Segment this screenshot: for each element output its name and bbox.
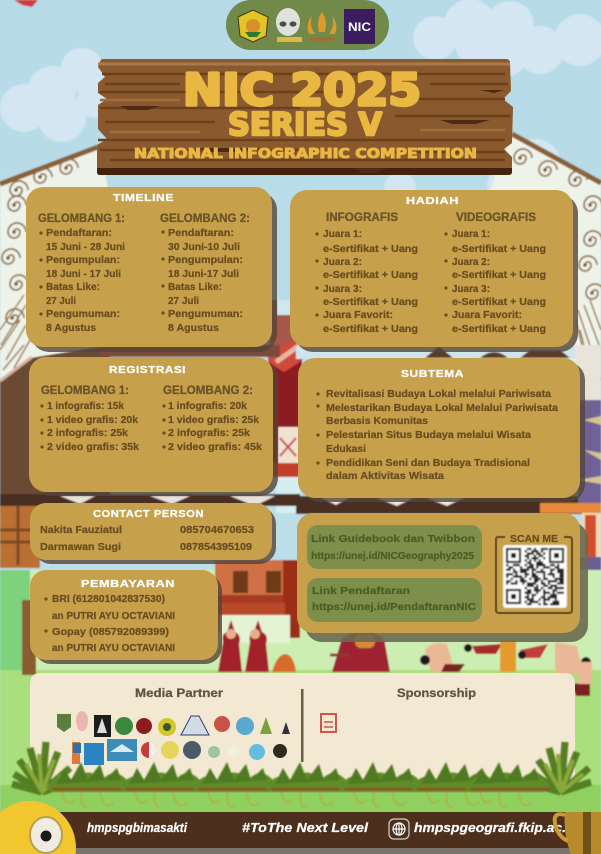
heading: sponsorship: Sponsorship [397,688,476,700]
column: gelombang 2 [160,211,250,334]
column: videografis: e-Sertifikat + Uang [452,296,546,308]
icon: globe [389,819,409,839]
panel: media partner and sponsorship [30,673,575,790]
panel: links and qr [297,513,588,642]
subtema list: Berbasis Komunitas [326,415,428,427]
column: infografis: INFOGRAFIS [326,210,398,224]
footer website: hmpspgeografi.fkip.ac. [414,820,566,835]
logo: alien mascot [276,8,302,42]
wooden title board [97,59,513,175]
contact 1 [40,524,254,536]
title line 3: NATIONAL INFOGRAPHIC COMPETITION [134,146,477,162]
column: gelombang 2: 27 Juli [168,295,199,307]
column: gelombang 1: 18 Juni - 17 Juli [46,268,121,280]
qr code [503,545,567,608]
column: videografis: Juara 1: [452,228,490,240]
scan me label: SCAN ME [510,533,558,545]
dancers [218,620,592,696]
panel: contact person [30,503,276,564]
column: gelombang 1 [38,211,125,334]
icon: trophy [555,812,601,854]
column: gelombang 2: Pendaftaran: [168,227,234,239]
column: infografis: Juara Favorit: [323,309,393,321]
ribbon fragment [14,0,38,7]
link button: pendaftaran: Link Pendaftaran [312,585,410,597]
subtema list [316,388,558,482]
column: videografis: e-Sertifikat + Uang [452,243,546,255]
heading: registrasi: REGISTRASI [109,364,186,376]
column: gelombang 1: 8 Agustus [46,322,96,334]
column: videografis: VIDEOGRAFIS [456,210,536,224]
column: gelombang 1 fees: 1 infografis: 15k [47,400,124,412]
link button: guidebook [307,525,482,569]
logo: NIC: NIC [348,22,371,34]
payment details: Gopay (085792089399) [52,626,169,638]
column: gelombang 1: GELOMBANG 1: [38,211,125,225]
right purple roof [575,345,601,410]
footer bar [0,812,601,854]
column: videografis: Juara Favorit: [452,309,522,321]
column: infografis: e-Sertifikat + Uang [323,269,418,281]
column: infografis: Juara 1: [323,228,362,240]
column: gelombang 2 fees [162,383,262,453]
logo: NIC [344,9,375,44]
logo pill [226,0,389,50]
column: videografis: e-Sertifikat + Uang [452,269,546,281]
icon: emoji [0,801,76,854]
media partner logos row 1 [57,711,290,737]
column: gelombang 2: 30 Juni-10 Juli [168,241,240,253]
column: infografis: Juara 2: [323,256,362,268]
link button: pendaftaran: https://unej.id/PendaftaranNIC [312,601,476,613]
left wooden house [0,503,40,568]
column: videografis: Juara 3: [452,283,490,295]
column: gelombang 2: Batas Like: [168,281,222,293]
heading: pembayaran: PEMBAYARAN [81,578,175,590]
column: videografis [444,210,546,335]
subtema list: Revitalisasi Budaya Lokal melalui Pariwisata [326,388,551,400]
logo: university shield [238,10,268,42]
contact 2 [40,541,252,553]
title line 1: NIC 2025 [183,65,421,116]
column: gelombang 2: Pengumuman: [168,308,243,320]
qr block [496,533,572,613]
column: gelombang 2 fees: 2 video grafis: 45k [168,441,262,453]
column: gelombang 2: Pengumpulan: [168,254,243,266]
column: gelombang 2 fees: GELOMBANG 2: [163,383,253,397]
column: gelombang 1 fees: 1 video grafis: 20k [47,414,138,426]
sponsor logo [321,714,336,732]
column: gelombang 1: Pengumuman: [46,308,120,320]
payment details: BRI (612801042837530) [52,593,165,605]
column: infografis [315,210,418,335]
link button: guidebook: https://unej.id/NICGeography2025 [311,550,474,562]
column: gelombang 2 fees: 2 infografis: 25k [168,427,250,439]
column: gelombang 1: Batas Like: [46,281,100,293]
clouds [0,0,601,204]
panel: pembayaran [30,570,222,664]
panel: timeline [26,187,277,352]
contact 1: 085704670653 [180,524,254,536]
footer hashtag: #ToThe Next Level [242,820,368,835]
subtema list: Pendidikan Seni dan Budaya Tradisional [326,457,530,469]
column: gelombang 1 fees [40,383,139,453]
column: gelombang 1: 15 Juni - 28 Juni [46,241,125,253]
ground [0,570,601,815]
link button: pendaftaran [307,578,482,622]
heading: contact person: CONTACT PERSON [93,508,204,520]
column: gelombang 2: GELOMBANG 2: [160,211,250,225]
heading: timeline: TIMELINE [113,192,174,204]
contact 1: Nakita Fauziatul [40,524,122,536]
logo: lotus flame [308,12,336,40]
media partner logos row 2 [72,739,287,765]
column: gelombang 1 fees: 2 video grafis: 35k [47,441,139,453]
column: infografis: e-Sertifikat + Uang [323,323,418,335]
column: gelombang 1: 27 Juli [46,295,76,307]
left gable ornament [0,145,110,382]
subtema list: Pelestarian Situs Budaya melalui Wisata [326,429,531,441]
subtema list: Melestarikan Budaya Lokal Melalui Pariwisata [326,402,558,414]
column: videografis: Juara 2: [452,256,490,268]
contact 2: Darmawan Sugi [40,541,121,553]
column: gelombang 2 fees: 1 infografis: 20k [168,400,247,412]
panel: hadiah [290,190,578,352]
ferns and vine border [12,742,591,808]
panel: subtema [298,358,585,502]
column: gelombang 1: Pendaftaran: [46,227,112,239]
column: infografis: e-Sertifikat + Uang [323,296,418,308]
payment details: an PUTRI AYU OCTAVIANI [52,610,175,622]
subtema list: dalam Aktivitas Wisata [326,470,444,482]
column: gelombang 1 fees: GELOMBANG 1: [41,383,129,397]
payment details: an PUTRI AYU OCTAVIANI [52,642,175,654]
footer handle: hmpspgbimasakti [87,820,187,835]
right gable ornament [490,133,601,400]
column: infografis: Juara 3: [323,283,362,295]
column: gelombang 2: 18 Juni-17 Juli [168,268,239,280]
dark band between upper panels [100,345,280,357]
swags between panels [0,494,300,506]
heading: subtema: SUBTEMA [401,368,464,380]
column: gelombang 1: Pengumpulan: [46,254,120,266]
panel: registrasi [29,357,278,496]
payment details [44,593,175,654]
column: videografis: e-Sertifikat + Uang [452,323,546,335]
centre roof [270,300,302,348]
column: gelombang 1 fees: 2 infografis: 25k [47,427,128,439]
contact 2: 087854395109 [180,541,252,553]
title line 2: SERIES V [228,107,382,143]
heading: hadiah: HADIAH [406,195,459,207]
subtema list: Edukasi [326,443,366,455]
column: infografis: e-Sertifikat + Uang [323,243,418,255]
orange house [215,560,300,632]
link button: guidebook: Link Guidebook dan Twibbon [311,533,475,545]
column: gelombang 2: 8 Agustus [168,322,219,334]
left wall [0,345,110,510]
column: gelombang 2 fees: 1 video grafis: 25k [168,414,259,426]
heading: media partner: Media Partner [135,688,224,700]
